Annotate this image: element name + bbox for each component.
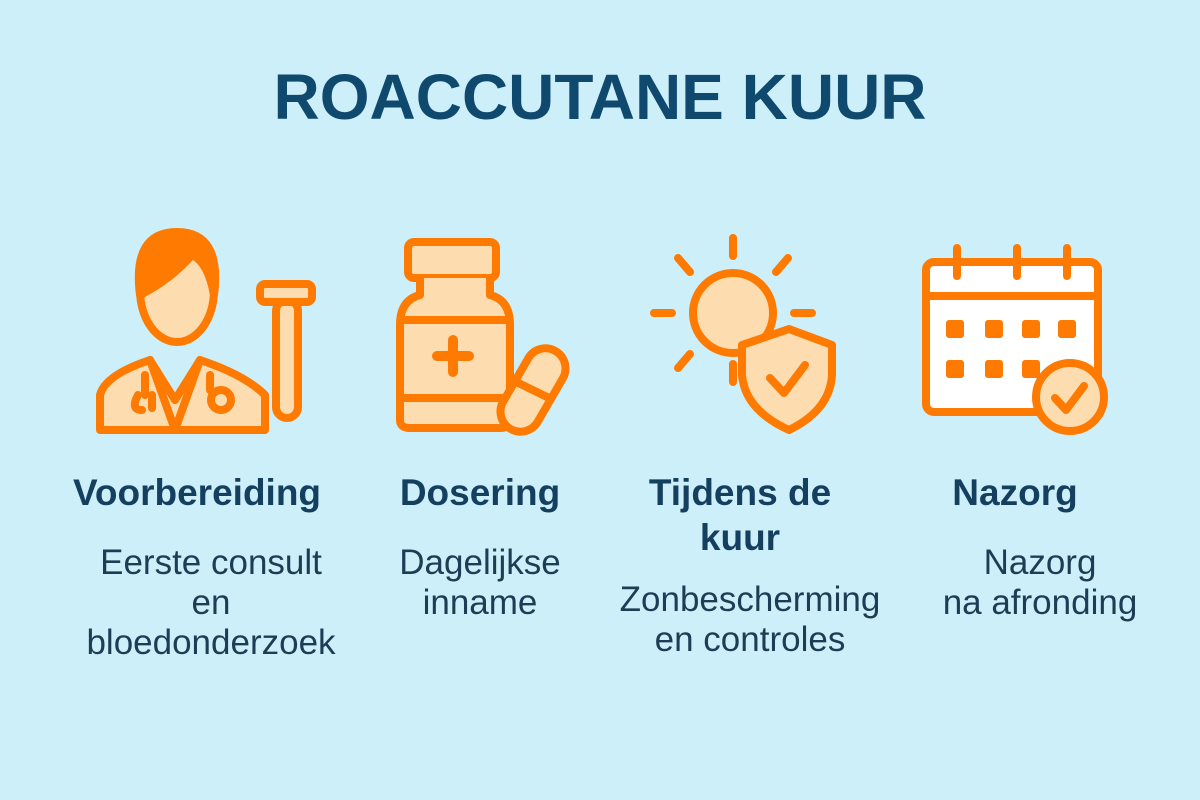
heading: Voorbereiding: Voorbereiding [73,472,321,513]
heading: Nazorg: Nazorg [952,472,1078,513]
icon: doctor [100,232,312,430]
icon: calendar with check [926,248,1104,431]
text: Voorbereiding: en [192,583,230,622]
text: Voorbereiding [86,543,336,662]
text: Dosering: inname [423,583,537,622]
title: ROACCUTANE KUUR [274,61,926,133]
icon: medicine bottle [400,242,573,439]
text: Voorbereiding: bloedonderzoek [86,623,336,662]
heading: Dosering: Dosering [400,472,560,513]
text: Tijdens de kuur: en controles [655,620,845,659]
text: Voorbereiding: Eerste consult [100,543,322,582]
text: Nazorg [943,543,1137,622]
text: Dosering [399,543,561,622]
heading: Tijdens de kuur: kuur [700,517,780,558]
text: Tijdens de kuur [620,580,880,659]
text: Nazorg: Nazorg [984,543,1096,582]
heading: Tijdens de kuur [649,472,831,558]
text: Tijdens de kuur: Zonbescherming [620,580,880,619]
icon: sun with shield [654,238,832,430]
text: Dosering: Dagelijkse [399,543,561,582]
heading: Tijdens de kuur: Tijdens de [649,472,831,513]
text: Nazorg: na afronding [943,583,1137,622]
